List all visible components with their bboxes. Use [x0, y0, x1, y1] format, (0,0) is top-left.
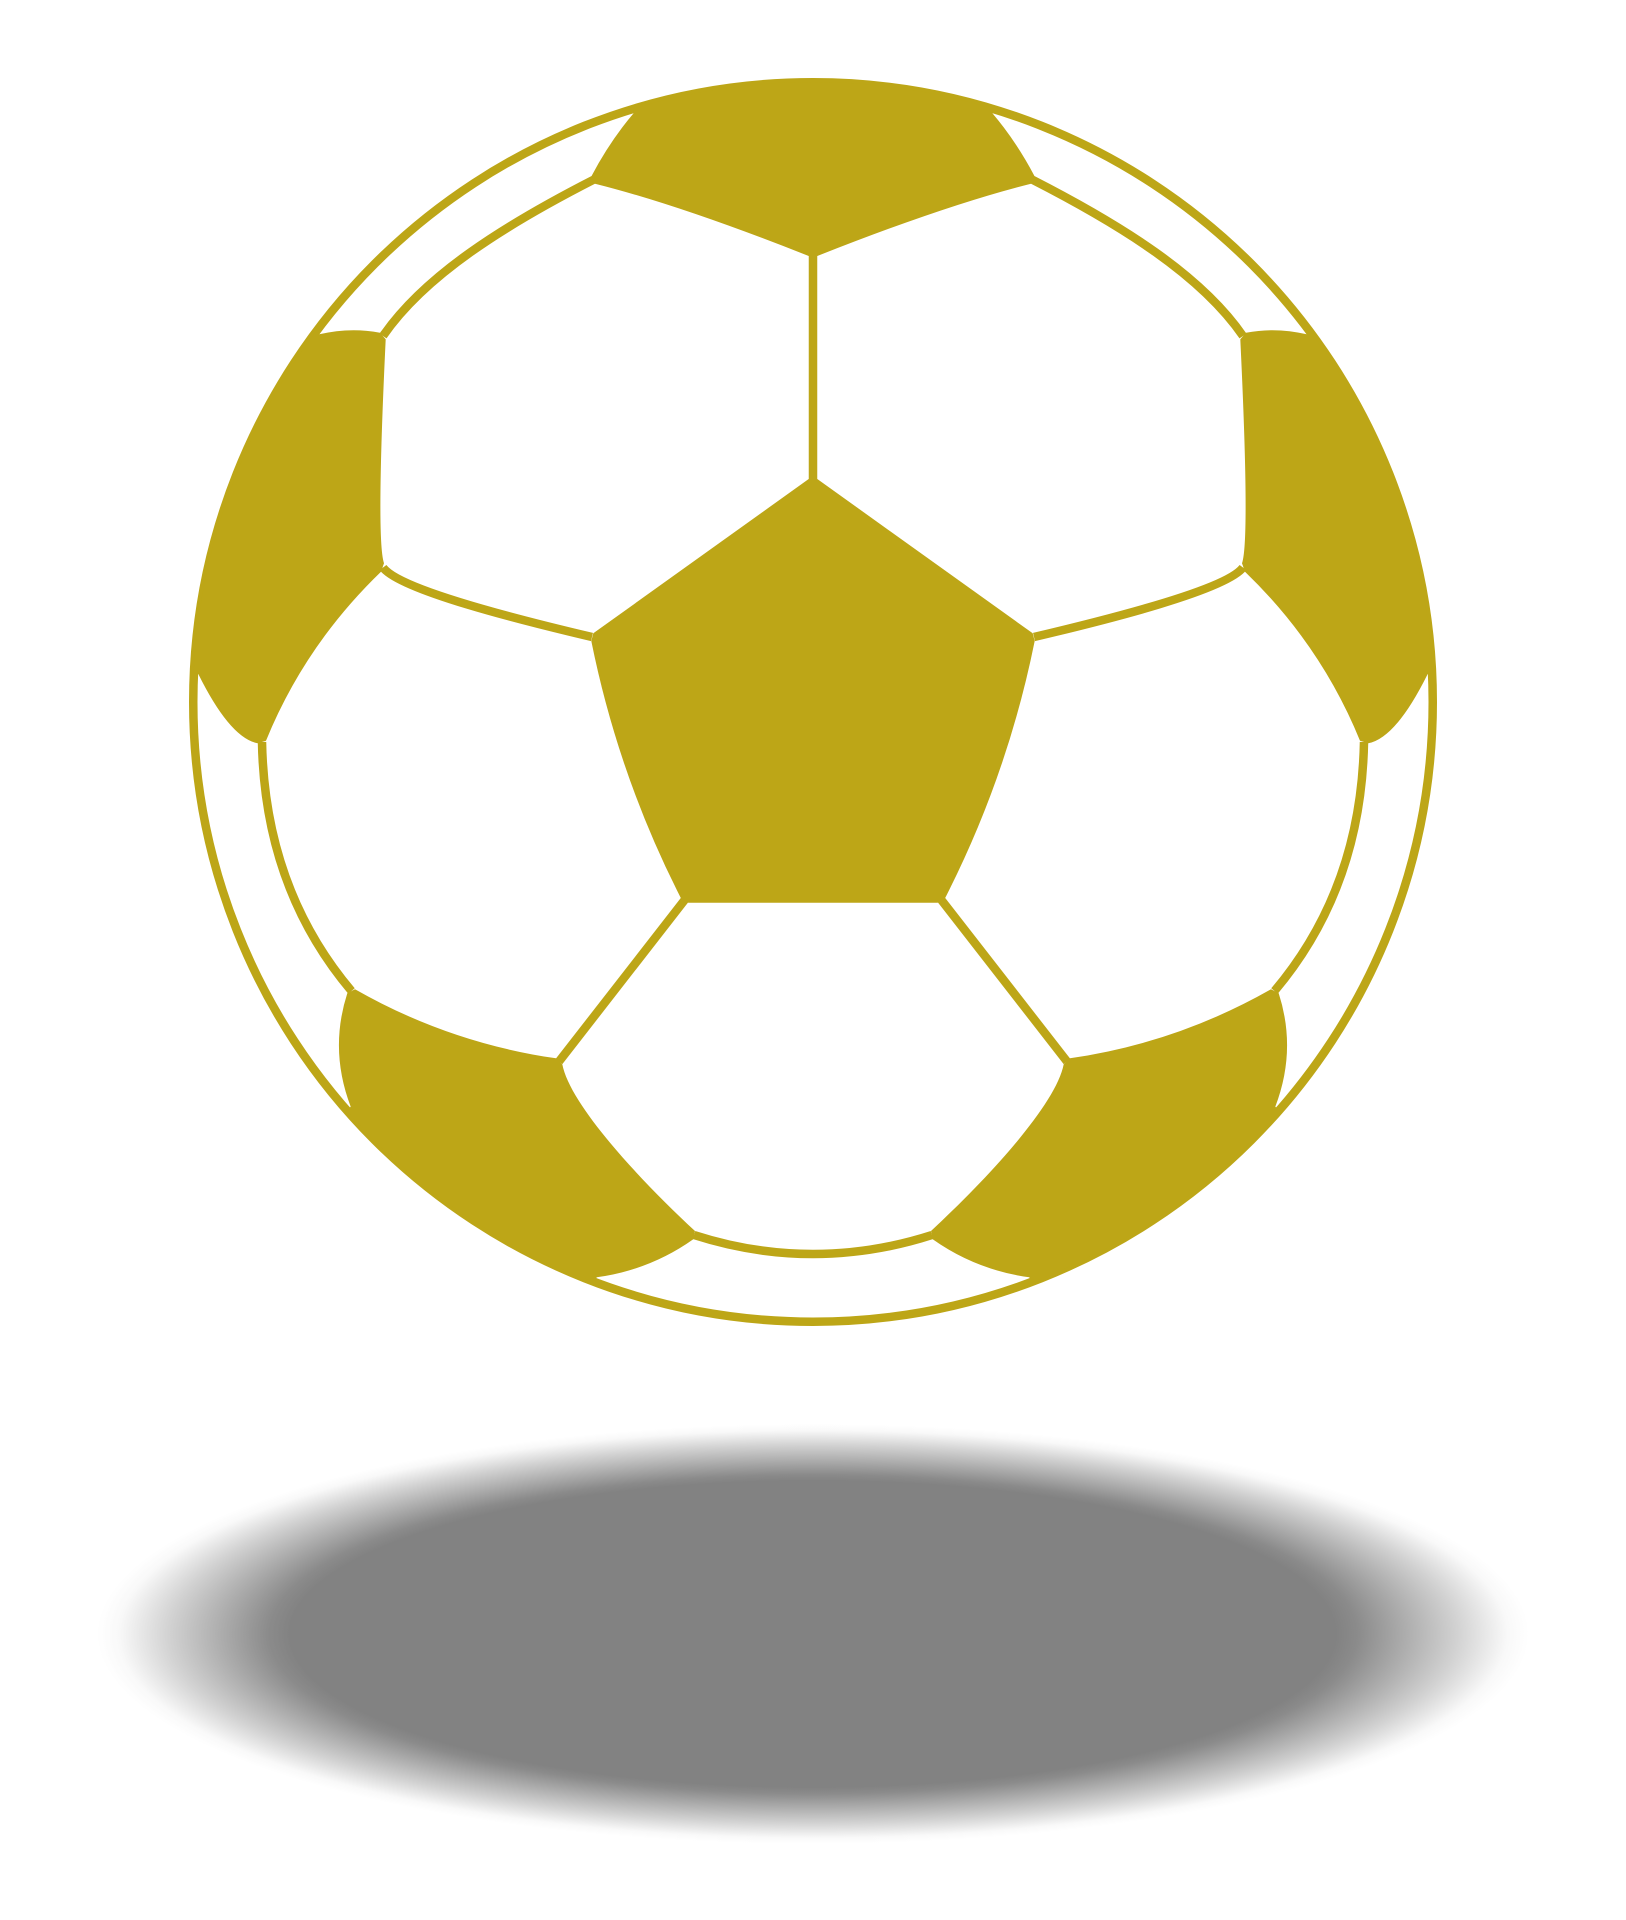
patch: lower right	[931, 989, 1287, 1282]
patch: upper right	[1240, 330, 1432, 743]
patch: top	[592, 82, 1034, 256]
seam lines	[262, 180, 1364, 1254]
ball outline	[193, 82, 1433, 1322]
patch: upper left	[194, 330, 386, 743]
ground shadow	[97, 1424, 1529, 1844]
patch: lower left	[339, 989, 695, 1282]
soccer ball	[193, 82, 1433, 1322]
patch: centre pentagon	[591, 479, 1035, 903]
